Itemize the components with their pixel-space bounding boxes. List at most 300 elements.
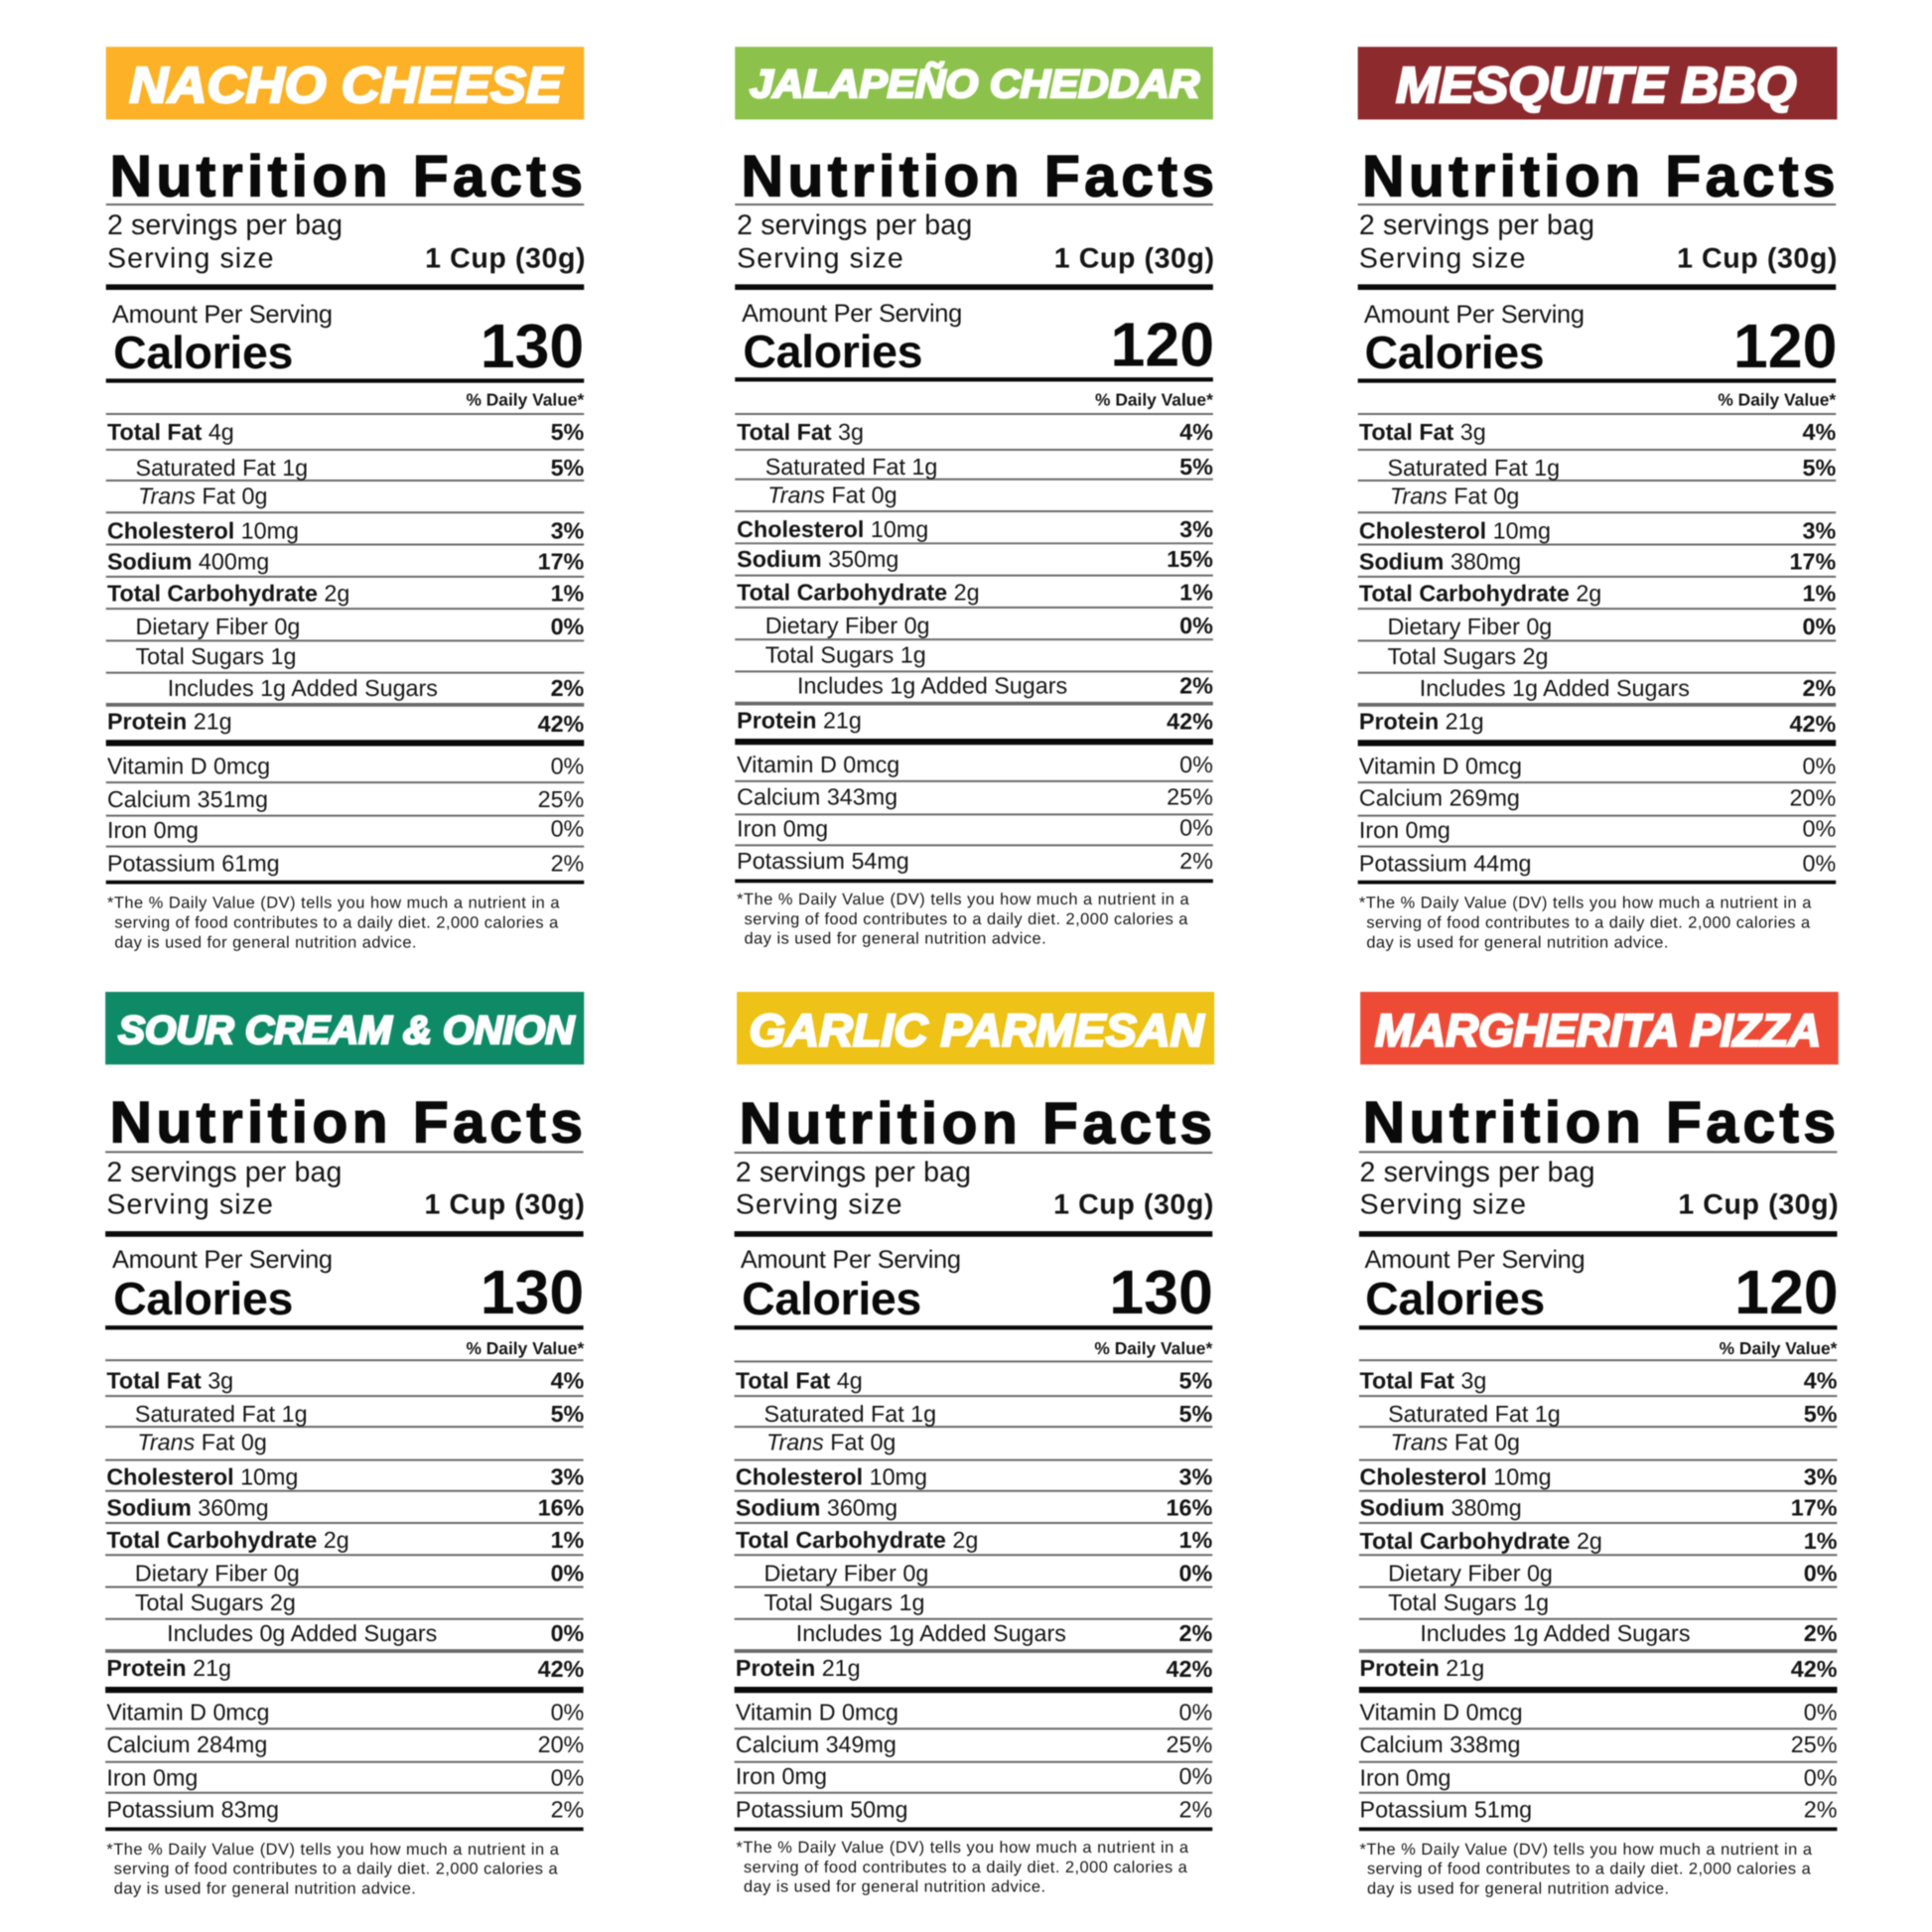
row: total carbohydrate xyxy=(106,1527,585,1553)
row: cholesterol: 3% xyxy=(1179,1463,1213,1489)
servings per bag: 2 servings per bag xyxy=(736,1156,971,1187)
panel: jalapeno cheddar xyxy=(735,47,1214,947)
row: cholesterol: Cholesterol 10mg xyxy=(106,1463,298,1489)
flavour banner: mesquite bbq xyxy=(1358,47,1837,119)
flavour banner: garlic parmesan: GARLIC PARMESAN xyxy=(750,1006,1205,1056)
footnote xyxy=(107,894,560,951)
row: vitamin d xyxy=(106,1699,585,1725)
row: potassium xyxy=(736,1796,1213,1823)
row: vitamin d: 0% xyxy=(1179,752,1213,777)
row: calcium: 20% xyxy=(1790,785,1837,811)
row: saturated fat: Saturated Fat 1g xyxy=(135,1401,308,1427)
row: saturated fat: 5% xyxy=(551,455,585,481)
row: total fat xyxy=(736,1368,1213,1394)
row: vitamin d: Vitamin D 0mcg xyxy=(1359,753,1522,778)
row: added sugars: Includes 1g Added Sugars xyxy=(797,673,1067,699)
row: protein: 42% xyxy=(1167,1656,1213,1682)
row: protein xyxy=(106,1655,585,1682)
row: total carbohydrate: 1% xyxy=(1804,1528,1838,1554)
row: total fat: 4% xyxy=(1804,1368,1838,1394)
flavour banner: nacho cheese: NACHO CHEESE xyxy=(129,57,564,113)
row: total fat: Total Fat 3g xyxy=(1359,419,1486,445)
row: iron xyxy=(1359,816,1837,843)
row: sodium: 17% xyxy=(1790,548,1837,574)
row: added sugars: Includes 1g Added Sugars xyxy=(796,1620,1066,1646)
daily value header: % Daily Value* xyxy=(1718,389,1837,409)
footnote xyxy=(1360,1840,1813,1897)
row: iron xyxy=(107,816,585,843)
row: total fat xyxy=(1359,419,1837,445)
row: added sugars xyxy=(797,673,1213,699)
row: total sugars: Total Sugars 1g xyxy=(765,642,926,668)
calories: Calories xyxy=(1364,327,1545,378)
row: added sugars: 2% xyxy=(1802,675,1837,701)
flavour banner: nacho cheese xyxy=(106,47,584,119)
row: added sugars: 2% xyxy=(551,675,585,701)
row: protein xyxy=(1359,709,1837,737)
footnote xyxy=(106,1840,560,1897)
row: potassium: 2% xyxy=(1179,1796,1213,1823)
row: sodium: Sodium 400mg xyxy=(107,548,269,574)
row: protein xyxy=(737,707,1213,735)
footnote: day is used for general nutrition advice. xyxy=(114,1879,416,1897)
footnote: *The % Daily Value (DV) tells you how much a nutrient in a xyxy=(1359,894,1812,911)
row: cholesterol xyxy=(1360,1463,1838,1489)
serving size: 1 Cup (30g) xyxy=(1053,1187,1213,1220)
row: potassium: Potassium 83mg xyxy=(106,1796,279,1823)
row: iron xyxy=(106,1764,585,1790)
row: saturated fat xyxy=(1388,1401,1838,1427)
footnote: day is used for general nutrition advice. xyxy=(114,932,416,951)
row: dietary fiber: Dietary Fiber 0g xyxy=(1387,614,1552,639)
calories: Calories xyxy=(743,326,923,377)
footnote: *The % Daily Value (DV) tells you how much a nutrient in a xyxy=(107,894,560,911)
serving size: Serving size xyxy=(1359,241,1525,274)
row: dietary fiber xyxy=(136,614,585,639)
row: iron: Iron 0mg xyxy=(106,1764,198,1790)
row: iron: 0% xyxy=(1804,1764,1838,1790)
row: saturated fat xyxy=(1387,455,1837,481)
row: trans fat: Trans Fat 0g xyxy=(137,1430,267,1455)
row: total carbohydrate xyxy=(736,1527,1213,1553)
row: added sugars xyxy=(796,1620,1213,1646)
panel: sour cream and onion xyxy=(105,992,585,1897)
serving size: 1 Cup (30g) xyxy=(1054,241,1214,274)
row: trans fat: Trans Fat 0g xyxy=(138,483,267,509)
row: calcium: Calcium 349mg xyxy=(736,1731,897,1757)
row: added sugars xyxy=(1420,675,1837,701)
flavour banner: mesquite bbq: MESQUITE BBQ xyxy=(1396,57,1797,113)
serving size: Serving size xyxy=(106,1187,273,1220)
serving size xyxy=(737,241,1214,274)
footnote: day is used for general nutrition advice. xyxy=(1366,932,1668,951)
row: protein: Protein 21g xyxy=(1359,709,1484,735)
row: saturated fat: 5% xyxy=(1179,1401,1213,1427)
row: total carbohydrate: 1% xyxy=(1179,579,1213,605)
row: total fat: 4% xyxy=(1802,419,1837,445)
row: iron: 0% xyxy=(551,1764,585,1790)
row: saturated fat: Saturated Fat 1g xyxy=(763,1401,936,1427)
row: calcium xyxy=(106,1731,585,1757)
serving size: Serving size xyxy=(1360,1187,1526,1220)
amount per serving: Amount Per Serving xyxy=(1364,1246,1586,1274)
row: total carbohydrate: Total Carbohydrate 2g xyxy=(736,1527,978,1553)
row: total fat xyxy=(1360,1368,1838,1394)
row: iron: 0% xyxy=(1802,816,1837,842)
calories xyxy=(1365,1257,1839,1327)
calories: 130 xyxy=(481,1257,584,1327)
footnote: serving of food contributes to a daily diet. 2,000 calories a xyxy=(1367,1860,1812,1877)
row: sodium: Sodium 350mg xyxy=(737,546,898,572)
row: saturated fat: 5% xyxy=(1802,455,1837,481)
footnote: day is used for general nutrition advice. xyxy=(1367,1879,1669,1897)
row: cholesterol xyxy=(737,516,1213,542)
row: iron: Iron 0mg xyxy=(1360,1764,1451,1790)
row: calcium: 25% xyxy=(538,786,585,812)
row: added sugars: Includes 1g Added Sugars xyxy=(1420,1620,1690,1646)
row: vitamin d xyxy=(107,753,585,778)
serving size xyxy=(106,1187,585,1220)
row: cholesterol: Cholesterol 10mg xyxy=(1359,517,1551,543)
row: sodium xyxy=(106,1494,585,1520)
row: calcium xyxy=(736,1731,1213,1757)
row: saturated fat: Saturated Fat 1g xyxy=(765,454,937,480)
serving size: 1 Cup (30g) xyxy=(425,241,586,274)
row: iron: Iron 0mg xyxy=(737,816,828,842)
row: saturated fat: Saturated Fat 1g xyxy=(1388,1401,1561,1427)
row: trans fat: Trans Fat 0g xyxy=(1390,483,1519,509)
row: vitamin d: Vitamin D 0mcg xyxy=(107,753,270,778)
calories: 120 xyxy=(1734,1257,1839,1327)
row: vitamin d xyxy=(1360,1699,1838,1725)
row: added sugars: Includes 0g Added Sugars xyxy=(167,1620,437,1646)
row: total carbohydrate: 1% xyxy=(551,1527,585,1553)
row: sodium xyxy=(737,546,1213,572)
row: total carbohydrate: 1% xyxy=(1179,1527,1213,1553)
footnote: serving of food contributes to a daily diet. 2,000 calories a xyxy=(114,1860,558,1877)
row: iron: 0% xyxy=(1179,1763,1213,1789)
row: potassium xyxy=(737,848,1213,874)
row: sodium: 16% xyxy=(538,1494,585,1520)
panel: garlic parmesan xyxy=(735,992,1214,1895)
row: total fat: Total Fat 3g xyxy=(737,419,864,445)
footnote: serving of food contributes to a daily diet. 2,000 calories a xyxy=(744,1858,1188,1876)
row: sodium: 17% xyxy=(1791,1494,1838,1520)
row: added sugars xyxy=(168,675,585,701)
row: added sugars: 0% xyxy=(551,1620,585,1646)
flavour banner: jalapeno cheddar: JALAPEÑO CHEDDAR xyxy=(750,62,1199,106)
row: total fat: Total Fat 4g xyxy=(736,1368,863,1394)
calories xyxy=(1364,311,1837,380)
daily value header: % Daily Value* xyxy=(1094,1338,1213,1358)
row: cholesterol: 3% xyxy=(1804,1463,1838,1489)
row: potassium: Potassium 50mg xyxy=(736,1796,908,1823)
row: sodium: Sodium 380mg xyxy=(1359,548,1521,574)
calories: 120 xyxy=(1110,310,1214,379)
serving size xyxy=(1359,241,1837,274)
row: protein: 42% xyxy=(1791,1656,1838,1682)
servings per bag: 2 servings per bag xyxy=(107,208,343,240)
row: added sugars: 2% xyxy=(1179,673,1213,699)
footnote: serving of food contributes to a daily diet. 2,000 calories a xyxy=(745,909,1188,928)
footnote: *The % Daily Value (DV) tells you how much a nutrient in a xyxy=(106,1840,560,1859)
row: iron xyxy=(736,1763,1213,1789)
row: vitamin d: 0% xyxy=(1802,753,1837,778)
row: dietary fiber: 0% xyxy=(551,1560,585,1586)
row: vitamin d: 0% xyxy=(1804,1699,1838,1725)
amount per serving: Amount Per Serving xyxy=(1364,301,1585,329)
footnote: serving of food contributes to a daily diet. 2,000 calories a xyxy=(114,913,559,931)
flavour banner: sour cream and onion xyxy=(105,992,584,1064)
row: cholesterol xyxy=(107,517,585,543)
daily value header: % Daily Value* xyxy=(1095,389,1214,409)
row: vitamin d: 0% xyxy=(551,753,585,778)
row: calcium: 25% xyxy=(1167,783,1213,809)
row: sodium: 15% xyxy=(1167,546,1213,572)
row: total sugars: Total Sugars 1g xyxy=(1388,1589,1549,1615)
row: iron: Iron 0mg xyxy=(1359,817,1450,843)
row: sodium: Sodium 380mg xyxy=(1360,1494,1522,1520)
row: added sugars: Includes 1g Added Sugars xyxy=(168,675,438,701)
row: dietary fiber: Dietary Fiber 0g xyxy=(135,1560,300,1586)
row: saturated fat: 5% xyxy=(1804,1401,1838,1427)
row: protein: Protein 21g xyxy=(1360,1655,1484,1681)
row: dietary fiber xyxy=(765,613,1213,638)
calories: Calories xyxy=(113,1273,293,1324)
row: potassium xyxy=(1359,850,1837,876)
serving size: Serving size xyxy=(737,241,903,274)
amount per serving: Amount Per Serving xyxy=(742,300,962,328)
row: total fat xyxy=(107,419,585,445)
row: sodium: Sodium 360mg xyxy=(736,1494,897,1520)
servings per bag: 2 servings per bag xyxy=(1359,208,1594,240)
row: calcium: Calcium 284mg xyxy=(106,1731,267,1757)
row: protein xyxy=(736,1655,1213,1682)
panel: nacho cheese xyxy=(106,47,586,951)
row: trans fat: Trans Fat 0g xyxy=(1391,1430,1520,1455)
row: cholesterol: Cholesterol 10mg xyxy=(737,516,928,542)
row: sodium xyxy=(736,1494,1213,1520)
row: iron: Iron 0mg xyxy=(736,1763,827,1789)
serving size: 1 Cup (30g) xyxy=(425,1187,585,1220)
row: potassium: Potassium 54mg xyxy=(737,848,909,874)
calories: Calories xyxy=(742,1273,921,1324)
footnote xyxy=(737,1838,1189,1895)
row: calcium xyxy=(1360,1731,1838,1757)
row: saturated fat xyxy=(765,454,1213,480)
footnote xyxy=(737,890,1189,947)
servings per bag: 2 servings per bag xyxy=(106,1156,342,1187)
row: sodium xyxy=(1359,548,1837,574)
row: saturated fat xyxy=(763,1401,1213,1427)
row: calcium: 25% xyxy=(1791,1731,1838,1757)
calories xyxy=(113,311,584,380)
row: total carbohydrate xyxy=(1360,1528,1838,1554)
row: dietary fiber: Dietary Fiber 0g xyxy=(765,613,930,638)
amount per serving: Amount Per Serving xyxy=(112,1246,333,1274)
row: iron: 0% xyxy=(551,816,585,842)
row: saturated fat: Saturated Fat 1g xyxy=(136,455,308,481)
row: sodium xyxy=(107,548,585,574)
row: total fat: 5% xyxy=(551,419,585,445)
amount per serving: Amount Per Serving xyxy=(741,1246,961,1274)
row: total carbohydrate: Total Carbohydrate 2g xyxy=(1360,1528,1602,1554)
calories xyxy=(742,1257,1213,1327)
row: dietary fiber xyxy=(1387,614,1837,639)
row: vitamin d: 0% xyxy=(551,1699,585,1725)
row: dietary fiber: 0% xyxy=(1179,613,1213,638)
serving size xyxy=(1360,1187,1839,1220)
panel: mesquite bbq xyxy=(1358,47,1837,951)
row: protein: Protein 21g xyxy=(106,1655,231,1681)
row: sodium xyxy=(1360,1494,1838,1520)
row: dietary fiber: 0% xyxy=(551,614,585,639)
daily value header: % Daily Value* xyxy=(466,389,585,409)
row: total fat: 4% xyxy=(1179,419,1213,445)
serving size: Serving size xyxy=(736,1187,901,1220)
row: dietary fiber: 0% xyxy=(1804,1560,1838,1586)
row: dietary fiber xyxy=(135,1560,585,1586)
serving size: Serving size xyxy=(107,241,274,274)
row: cholesterol: Cholesterol 10mg xyxy=(107,517,299,543)
row: protein: 42% xyxy=(538,711,585,737)
row: potassium: 2% xyxy=(1179,848,1213,874)
row: potassium: 2% xyxy=(551,1796,585,1823)
row: cholesterol: 3% xyxy=(551,1463,585,1489)
heading: Nutrition Facts xyxy=(1363,1090,1836,1156)
heading: Nutrition Facts xyxy=(742,144,1214,209)
row: potassium xyxy=(1360,1796,1838,1823)
heading: Nutrition Facts xyxy=(109,1090,583,1156)
row: vitamin d: Vitamin D 0mcg xyxy=(1360,1699,1523,1725)
row: total carbohydrate: Total Carbohydrate 2g xyxy=(1359,581,1601,607)
heading: Nutrition Facts xyxy=(740,1092,1212,1157)
row: added sugars: 2% xyxy=(1179,1620,1213,1646)
row: total fat: 4% xyxy=(551,1368,585,1394)
row: saturated fat xyxy=(136,455,585,481)
calories xyxy=(743,310,1214,379)
row: protein: Protein 21g xyxy=(107,709,232,735)
row: total fat: Total Fat 4g xyxy=(107,419,234,445)
serving size xyxy=(736,1187,1213,1220)
heading: Nutrition Facts xyxy=(109,144,583,209)
row: potassium: 0% xyxy=(1802,850,1837,876)
row: total sugars: Total Sugars 1g xyxy=(136,643,296,669)
row: vitamin d xyxy=(737,752,1213,777)
row: protein: Protein 21g xyxy=(736,1655,861,1681)
row: total carbohydrate xyxy=(737,579,1213,605)
row: saturated fat: Saturated Fat 1g xyxy=(1387,455,1560,481)
row: potassium: Potassium 51mg xyxy=(1360,1796,1532,1823)
flavour banner: sour cream and onion: SOUR CREAM & ONION xyxy=(118,1008,575,1052)
row: total sugars: Total Sugars 2g xyxy=(135,1589,296,1615)
footnote: serving of food contributes to a daily diet. 2,000 calories a xyxy=(1366,913,1811,931)
row: cholesterol xyxy=(1359,517,1837,543)
row: protein: 42% xyxy=(1167,709,1213,735)
row: iron xyxy=(1360,1764,1838,1790)
row: total carbohydrate: Total Carbohydrate 2g xyxy=(106,1527,349,1553)
row: iron: Iron 0mg xyxy=(107,817,199,843)
row: protein xyxy=(1360,1655,1838,1682)
servings per bag: 2 servings per bag xyxy=(737,208,972,240)
flavour banner: margherita pizza xyxy=(1360,992,1839,1064)
row: dietary fiber: Dietary Fiber 0g xyxy=(136,614,300,639)
row: potassium: Potassium 44mg xyxy=(1359,850,1532,876)
row: vitamin d: 0% xyxy=(1179,1699,1213,1725)
flavour banner: margherita pizza: MARGHERITA PIZZA xyxy=(1375,1006,1821,1056)
row: dietary fiber: 0% xyxy=(1179,1560,1213,1586)
row: total carbohydrate: 1% xyxy=(551,581,585,607)
row: protein xyxy=(107,709,585,737)
row: protein: Protein 21g xyxy=(737,707,862,733)
row: cholesterol: Cholesterol 10mg xyxy=(736,1463,927,1489)
row: added sugars: Includes 1g Added Sugars xyxy=(1420,675,1690,701)
row: protein: 42% xyxy=(1790,711,1837,737)
row: dietary fiber: Dietary Fiber 0g xyxy=(1388,1560,1553,1586)
row: sodium: Sodium 360mg xyxy=(106,1494,269,1520)
footnote: day is used for general nutrition advice. xyxy=(744,1877,1045,1895)
serving size: 1 Cup (30g) xyxy=(1678,1187,1839,1220)
row: dietary fiber: 0% xyxy=(1802,614,1837,639)
row: saturated fat: 5% xyxy=(1179,454,1213,480)
serving size: 1 Cup (30g) xyxy=(1677,241,1837,274)
row: vitamin d xyxy=(736,1699,1213,1725)
row: vitamin d xyxy=(1359,753,1837,778)
row: potassium xyxy=(106,1796,585,1823)
row: dietary fiber xyxy=(1388,1560,1838,1586)
row: added sugars xyxy=(1420,1620,1838,1646)
daily value header: % Daily Value* xyxy=(1720,1338,1838,1358)
row: calcium: Calcium 269mg xyxy=(1359,785,1520,811)
calories: 130 xyxy=(1109,1257,1213,1327)
row: dietary fiber xyxy=(763,1560,1213,1586)
row: potassium: 2% xyxy=(1804,1796,1838,1823)
heading: Nutrition Facts xyxy=(1362,144,1836,209)
row: potassium xyxy=(107,850,585,876)
row: calcium xyxy=(737,783,1213,809)
row: total fat: 5% xyxy=(1179,1368,1213,1394)
servings per bag: 2 servings per bag xyxy=(1360,1156,1595,1187)
calories xyxy=(113,1257,584,1327)
calories: Calories xyxy=(113,327,293,378)
row: total carbohydrate xyxy=(107,581,585,607)
row: calcium xyxy=(1359,785,1837,811)
row: vitamin d: Vitamin D 0mcg xyxy=(736,1699,898,1725)
flavour banner: jalapeno cheddar xyxy=(735,47,1213,119)
row: trans fat: Trans Fat 0g xyxy=(767,482,897,507)
row: total carbohydrate: Total Carbohydrate 2g xyxy=(107,581,349,607)
row: calcium: 20% xyxy=(538,1731,585,1757)
row: iron xyxy=(737,814,1213,842)
row: vitamin d: Vitamin D 0mcg xyxy=(737,752,899,777)
row: calcium: Calcium 338mg xyxy=(1360,1731,1520,1757)
row: calcium: Calcium 343mg xyxy=(737,783,897,809)
panel: margherita pizza xyxy=(1359,992,1839,1897)
row: calcium xyxy=(107,786,585,812)
row: added sugars: 2% xyxy=(1804,1620,1838,1646)
row: iron: 0% xyxy=(1179,814,1213,840)
row: cholesterol xyxy=(106,1463,585,1489)
footnote: *The % Daily Value (DV) tells you how much a nutrient in a xyxy=(737,1838,1189,1857)
footnote xyxy=(1359,894,1812,951)
row: cholesterol xyxy=(736,1463,1213,1489)
flavour banner: garlic parmesan xyxy=(737,992,1214,1064)
row: vitamin d: Vitamin D 0mcg xyxy=(106,1699,269,1725)
row: total carbohydrate: Total Carbohydrate 2g xyxy=(737,579,980,605)
row: sodium: 16% xyxy=(1167,1494,1213,1520)
row: saturated fat: 5% xyxy=(551,1401,585,1427)
row: total fat xyxy=(106,1368,585,1394)
